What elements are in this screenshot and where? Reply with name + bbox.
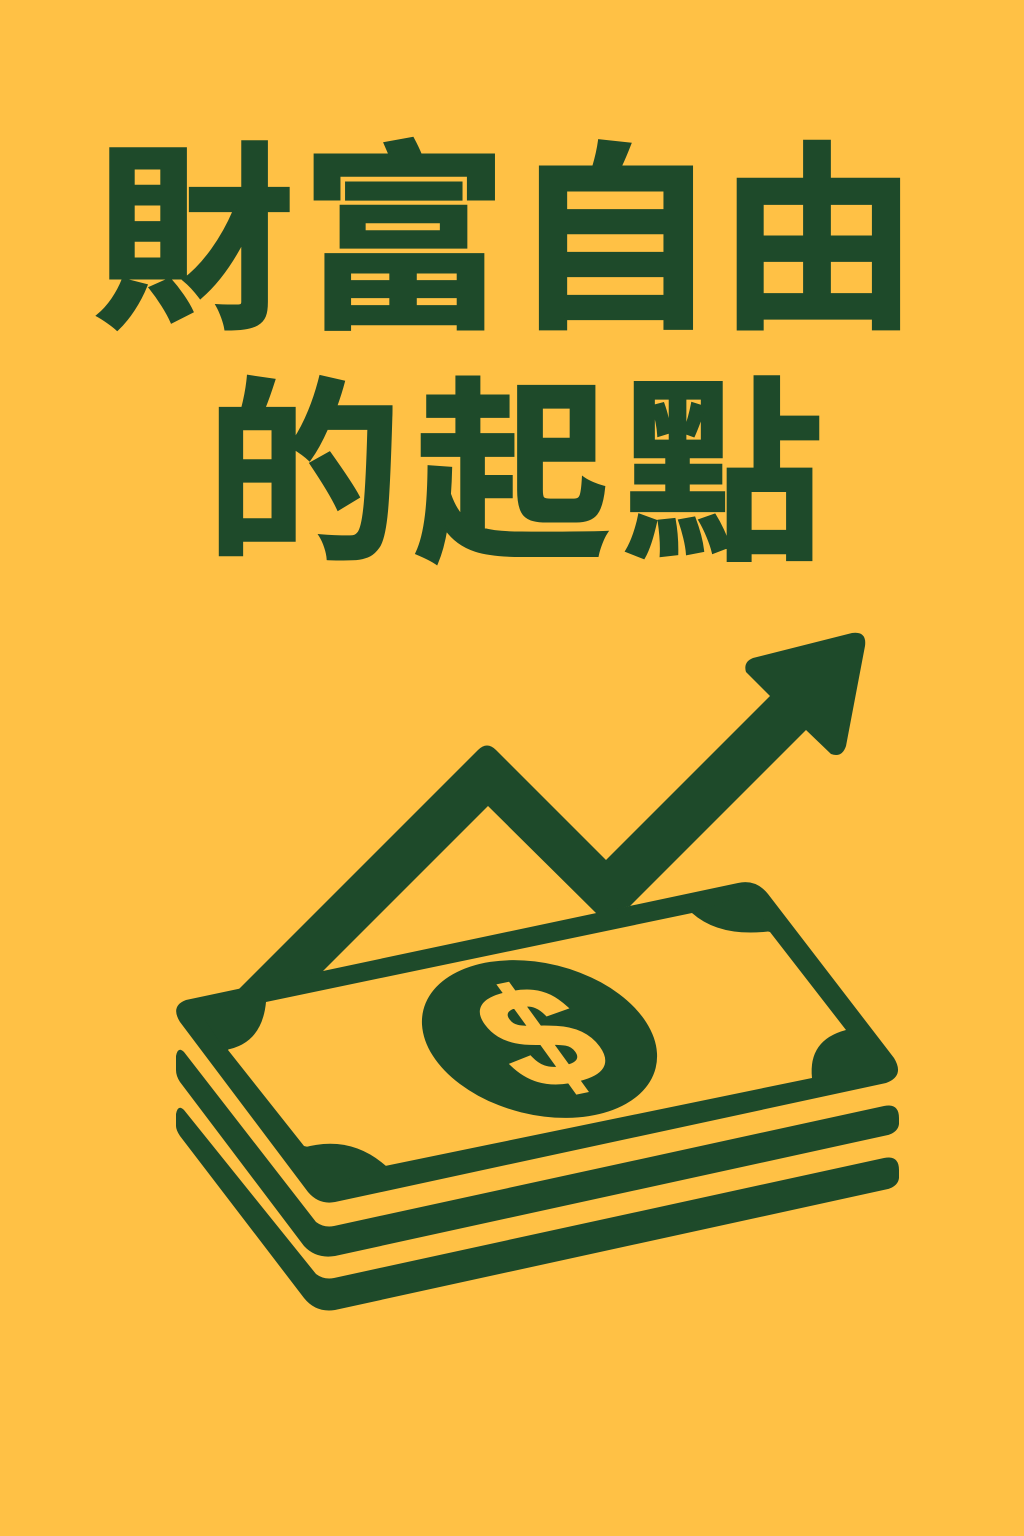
- title: 點: [622, 366, 824, 585]
- title: 起: [414, 366, 610, 585]
- banknote corner: top right: [692, 895, 772, 933]
- banknote corner: bottom left: [302, 1144, 386, 1185]
- title: 的: [206, 366, 402, 585]
- banknote corner: bottom right: [812, 1030, 870, 1078]
- title: 財: [94, 131, 294, 354]
- icon: stack of banknotes: [176, 882, 899, 1310]
- title: 富: [300, 131, 508, 354]
- bottom banknote edge: [176, 1108, 899, 1310]
- title: [94, 131, 918, 585]
- top banknote: [176, 882, 898, 1203]
- banknote corner: top left: [205, 1000, 266, 1050]
- title: 由: [718, 131, 918, 354]
- dollar coin: [405, 937, 674, 1141]
- middle banknote edge: [176, 1050, 899, 1257]
- icon: rising arrow: [236, 633, 865, 992]
- dollar sign: $: [443, 954, 639, 1119]
- title: 自: [510, 131, 718, 354]
